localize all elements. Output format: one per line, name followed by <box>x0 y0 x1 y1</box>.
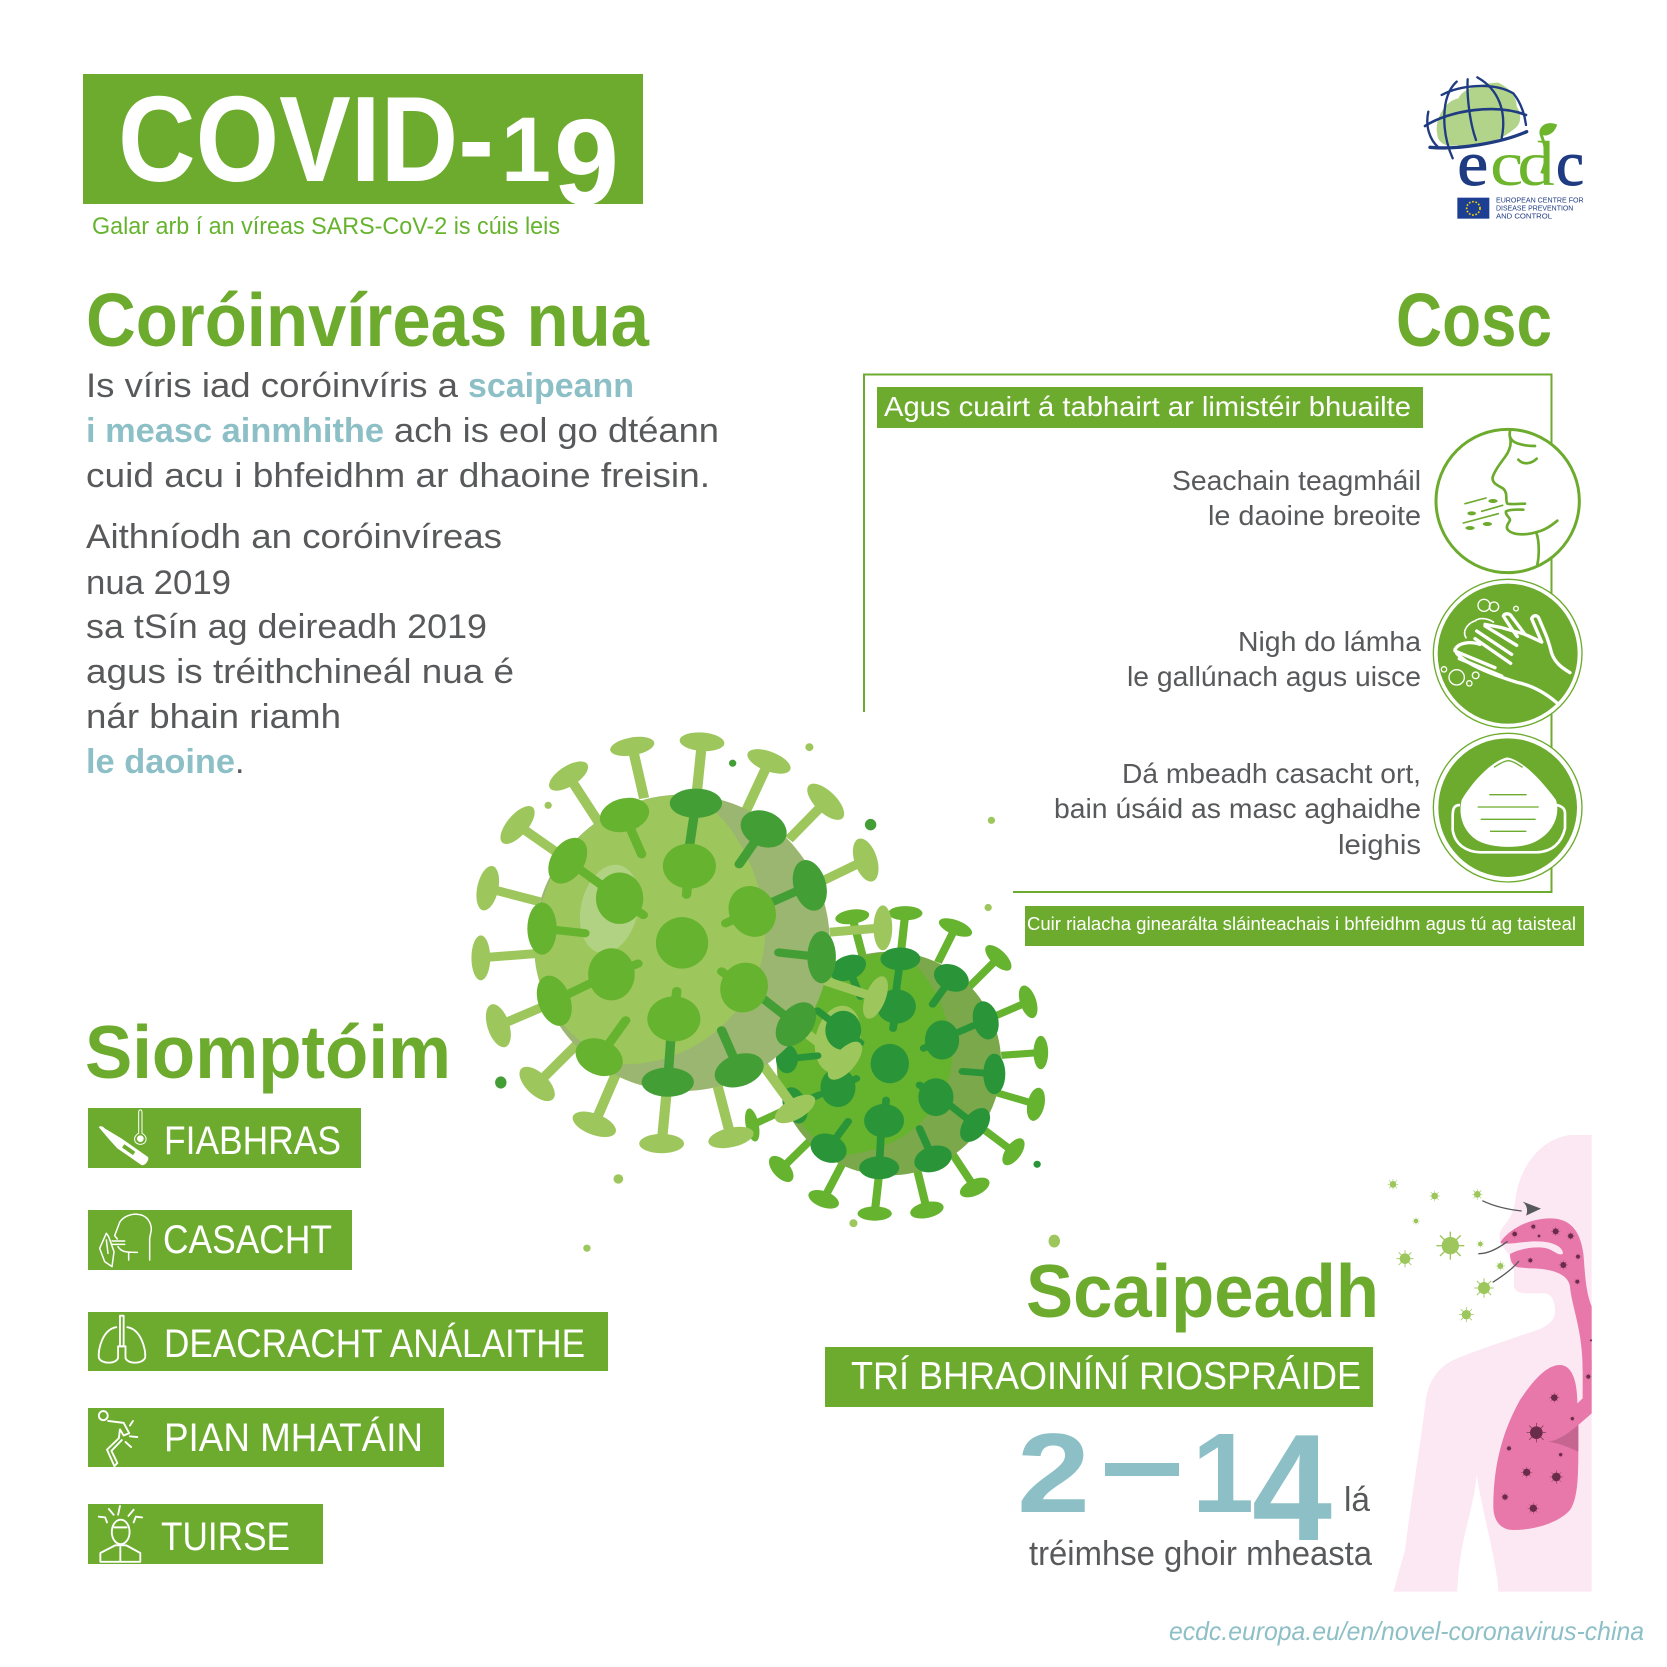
advice: use a mask: Dá mbeadh casacht ort, <box>1122 758 1421 789</box>
advice: avoid contact <box>1172 465 1421 531</box>
symptom: muscle pain <box>88 1408 444 1467</box>
icon: tired person <box>99 1506 142 1562</box>
icon: person in pain <box>99 1411 137 1466</box>
stat: 2-14 days: 1 <box>1192 1410 1254 1536</box>
logo: ecdc <box>1425 77 1584 221</box>
heading: Siomptóim: Siomptóim <box>85 1010 451 1094</box>
symptom: cough <box>88 1210 352 1270</box>
symptom: breathing difficulty: DEACRACHT ANÁLAITHE <box>164 1321 585 1366</box>
text block: coronavirus description: cuid acu i bhfeidhm ar dhaoine freisin. <box>86 457 710 495</box>
text block: coronavirus description <box>86 367 719 495</box>
text block: new coronavirus 2019: Aithníodh an coróinvíreas <box>86 518 502 556</box>
text block: coronavirus description: i measc ainmhithe <box>86 412 384 450</box>
subtitle: Galar arb í an víreas SARS-CoV-2 is cúis leis <box>92 213 560 240</box>
text block: new coronavirus 2019: agus is tréithchineál nua é <box>86 653 514 691</box>
symptom: fatigue: TUIRSE <box>161 1515 290 1559</box>
text block: new coronavirus 2019: . <box>235 743 244 781</box>
title banner: COVID-19: 9 <box>554 94 619 230</box>
icon: lungs <box>99 1316 145 1363</box>
label: days: lá <box>1344 1481 1370 1519</box>
arrows: exhale <box>1478 1241 1519 1282</box>
logo: ecdc: EUROPEAN CENTRE FOR <box>1496 198 1584 205</box>
small virus <box>742 906 1048 1221</box>
symptom: breathing difficulty <box>88 1312 608 1371</box>
label: incubation period: tréimhse ghoir mheasta <box>1029 1535 1372 1573</box>
icon: coughing head <box>100 1214 151 1267</box>
banner: respiratory droplets <box>825 1347 1373 1407</box>
heading: Cosc: Cosc <box>1396 278 1552 362</box>
text block: coronavirus description: ach is eol go dtéann <box>394 412 719 450</box>
text block: new coronavirus 2019: nua 2019 <box>86 564 231 602</box>
scattered particles <box>495 743 1060 1252</box>
advice: wash hands: Nigh do lámha <box>1238 626 1421 657</box>
logo: ecdc: d <box>1517 129 1555 199</box>
stat: 2-14 days: 4 <box>1252 1403 1332 1573</box>
title banner: COVID-19: 1 <box>501 99 551 201</box>
heading: Scaipeadh: Scaipeadh <box>1026 1249 1379 1333</box>
symptom: fatigue <box>88 1504 323 1564</box>
advice: use a mask: bain úsáid as masc aghaidhe <box>1054 793 1421 824</box>
text block: new coronavirus 2019: nár bhain riamh <box>86 698 341 736</box>
advice: use a mask: leighis <box>1338 829 1421 860</box>
text block: new coronavirus 2019: le daoine <box>86 743 235 781</box>
arrow: inhale <box>1482 1201 1541 1216</box>
callout: travel hygiene rules <box>1025 906 1584 946</box>
text block: new coronavirus 2019 <box>86 518 514 781</box>
logo: ecdc: c <box>1490 129 1523 199</box>
logo: ecdc: e <box>1457 129 1488 199</box>
illustration: respiratory tract figure <box>1388 1135 1592 1592</box>
icon: medical mask <box>1433 733 1582 882</box>
advice: avoid contact: le daoine breoite <box>1208 500 1421 531</box>
text block: coronavirus description: Is víris iad coróinvíris a <box>86 367 458 405</box>
advice: use a mask <box>1054 758 1421 860</box>
logo: ecdc: c <box>1556 129 1584 199</box>
advice: wash hands <box>1127 626 1421 692</box>
droplet viruses <box>1388 1179 1505 1322</box>
symptom: cough: CASACHT <box>163 1218 332 1262</box>
panel header: visiting affected areas: Agus cuairt á tabhairt ar limistéir bhuailte <box>884 391 1411 422</box>
heading: Coróinvíreas nua: Coróinvíreas nua <box>86 278 650 362</box>
source URL: ecdc.europa.eu/en/novel-coronavirus-china <box>1169 1616 1644 1646</box>
advice: avoid contact: Seachain teagmháil <box>1172 465 1421 496</box>
text block: coronavirus description: scaipeann <box>468 367 634 405</box>
symptom: muscle pain: PIAN MHATÁIN <box>164 1415 423 1460</box>
icon: face breathing <box>1436 429 1579 573</box>
callout: travel hygiene rules: Cuir rialacha ginearálta sláinteachais i bhfeidhm agus tú ag taisteal <box>1027 913 1576 934</box>
panel: prevention frame <box>864 374 1552 892</box>
icon: washing hands <box>1433 579 1582 728</box>
illustration: two coronavirus particles <box>471 731 1060 1252</box>
large virus <box>471 731 893 1153</box>
logo: ecdc: DISEASE PREVENTION <box>1496 206 1573 213</box>
advice: wash hands: le gallúnach agus uisce <box>1127 661 1421 692</box>
text block: new coronavirus 2019: sa tSín ag deireadh 2019 <box>86 608 487 646</box>
title banner: COVID-19: COVID- <box>118 71 494 207</box>
symptom: fever: FIABHRAS <box>164 1119 341 1163</box>
banner: respiratory droplets: TRÍ BHRAOINÍNÍ RIOSPRÁIDE <box>851 1355 1361 1398</box>
title banner: COVID-19 <box>83 71 643 230</box>
symptom: fever <box>88 1108 361 1168</box>
icon: thermometers <box>99 1110 148 1165</box>
stat: 2-14 days <box>1017 1403 1332 1573</box>
logo: ecdc: AND CONTROL <box>1496 214 1552 221</box>
stat: 2-14 days: 2 <box>1017 1410 1090 1536</box>
